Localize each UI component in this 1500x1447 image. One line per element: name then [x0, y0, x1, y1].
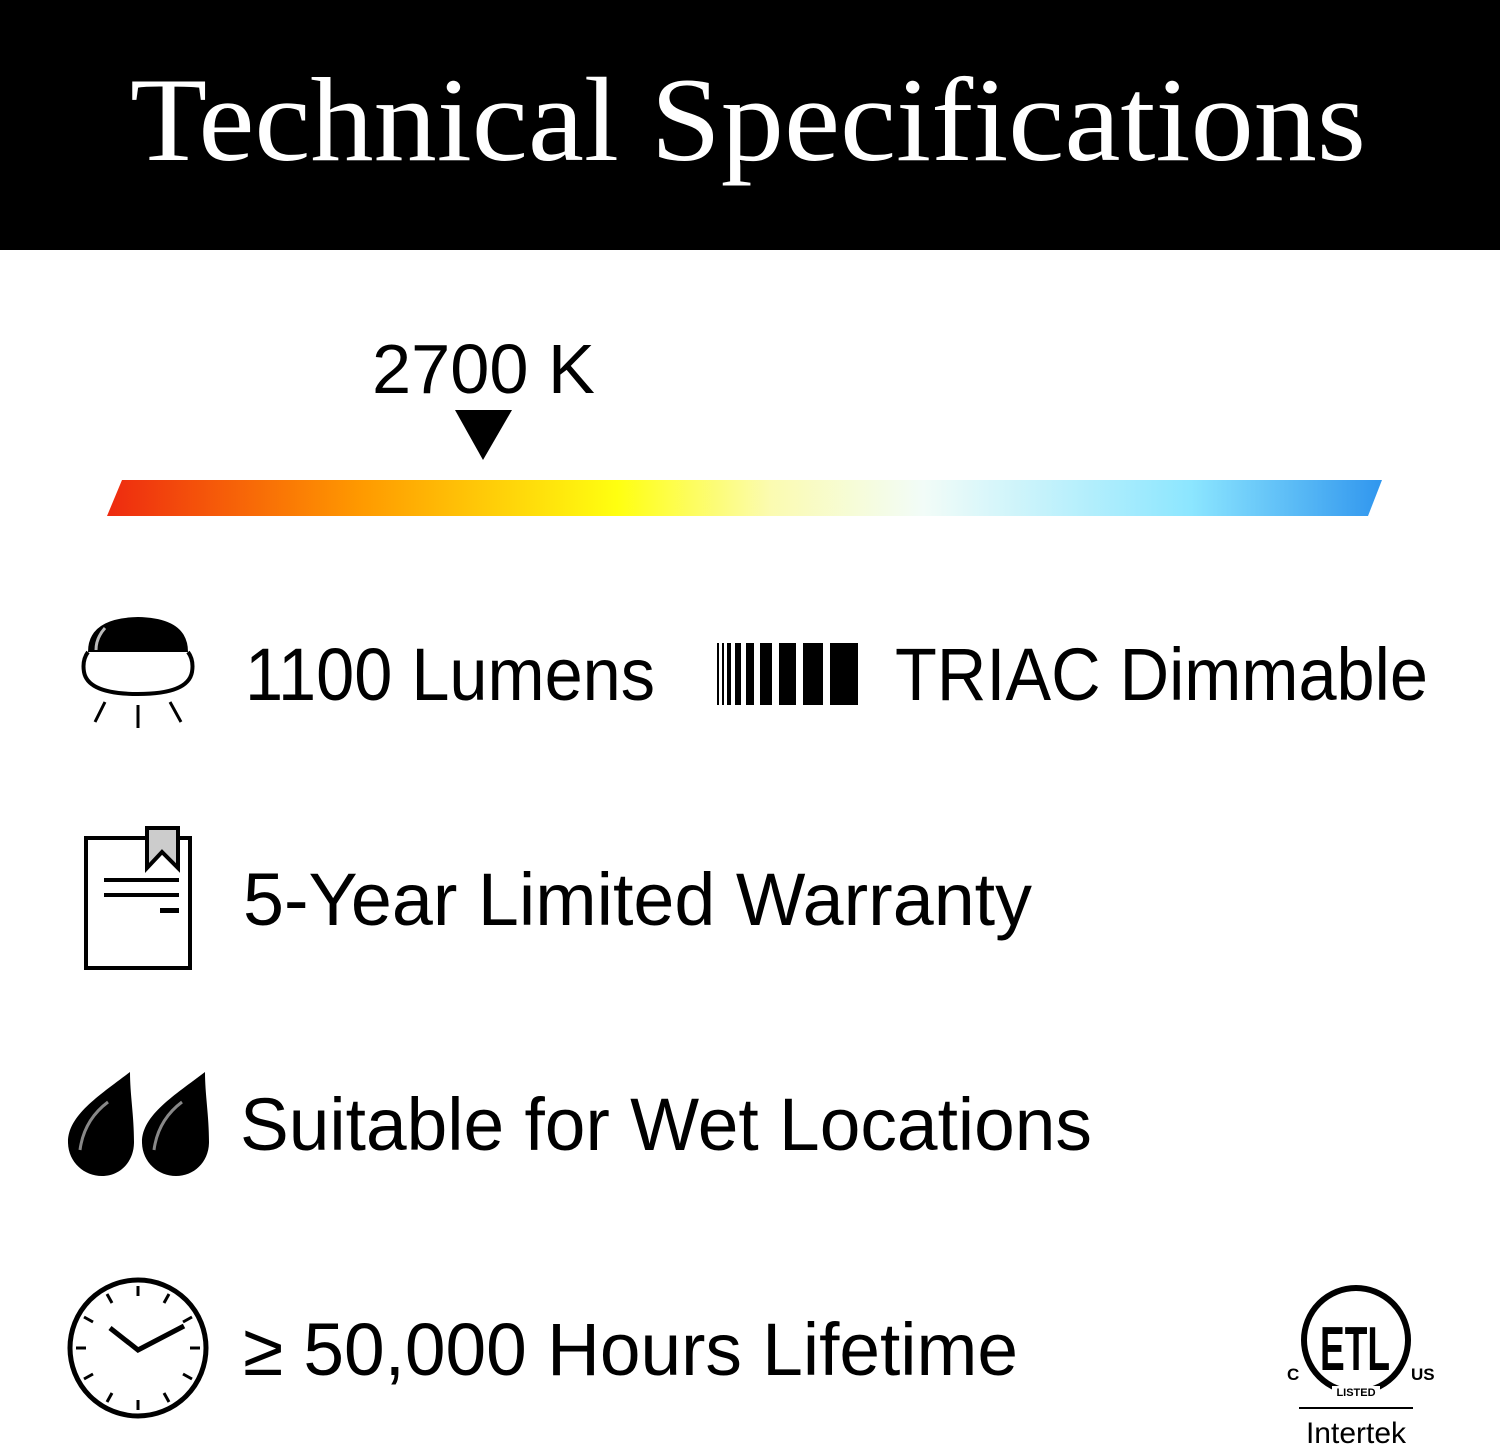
ETL listed logo: ETL — [1320, 1315, 1390, 1384]
icon: document — [86, 828, 190, 968]
header banner — [0, 0, 1500, 250]
text: 5-Year Limited Warranty — [243, 858, 1032, 941]
icon: clock — [70, 1280, 206, 1416]
ETL listed logo — [1287, 1288, 1435, 1447]
ETL listed logo: LISTED — [1336, 1387, 1376, 1399]
gradient bar — [107, 480, 1382, 516]
color temperature scale — [107, 330, 1382, 516]
ETL listed logo: C — [1287, 1365, 1299, 1384]
spec: lifetime — [70, 1280, 1018, 1416]
text: Suitable for Wet Locations — [240, 1083, 1092, 1166]
spec: lumens — [84, 617, 655, 728]
icon: water drops — [68, 1072, 209, 1176]
icon: dimming bars — [717, 643, 858, 705]
label: 2700 K: 2700 K — [372, 330, 595, 408]
text: TRIAC Dimmable — [895, 633, 1428, 716]
ETL listed logo: US — [1411, 1365, 1435, 1384]
text: 1100 Lumens — [245, 633, 655, 716]
title: Technical Specifications — [130, 53, 1366, 186]
marker arrow — [455, 410, 512, 460]
spec: wet locations — [68, 1072, 1092, 1176]
spec: warranty — [86, 828, 1032, 968]
icon: lamp — [84, 617, 192, 728]
text: ≥ 50,000 Hours Lifetime — [243, 1308, 1018, 1391]
spec: dimmable — [717, 633, 1428, 716]
